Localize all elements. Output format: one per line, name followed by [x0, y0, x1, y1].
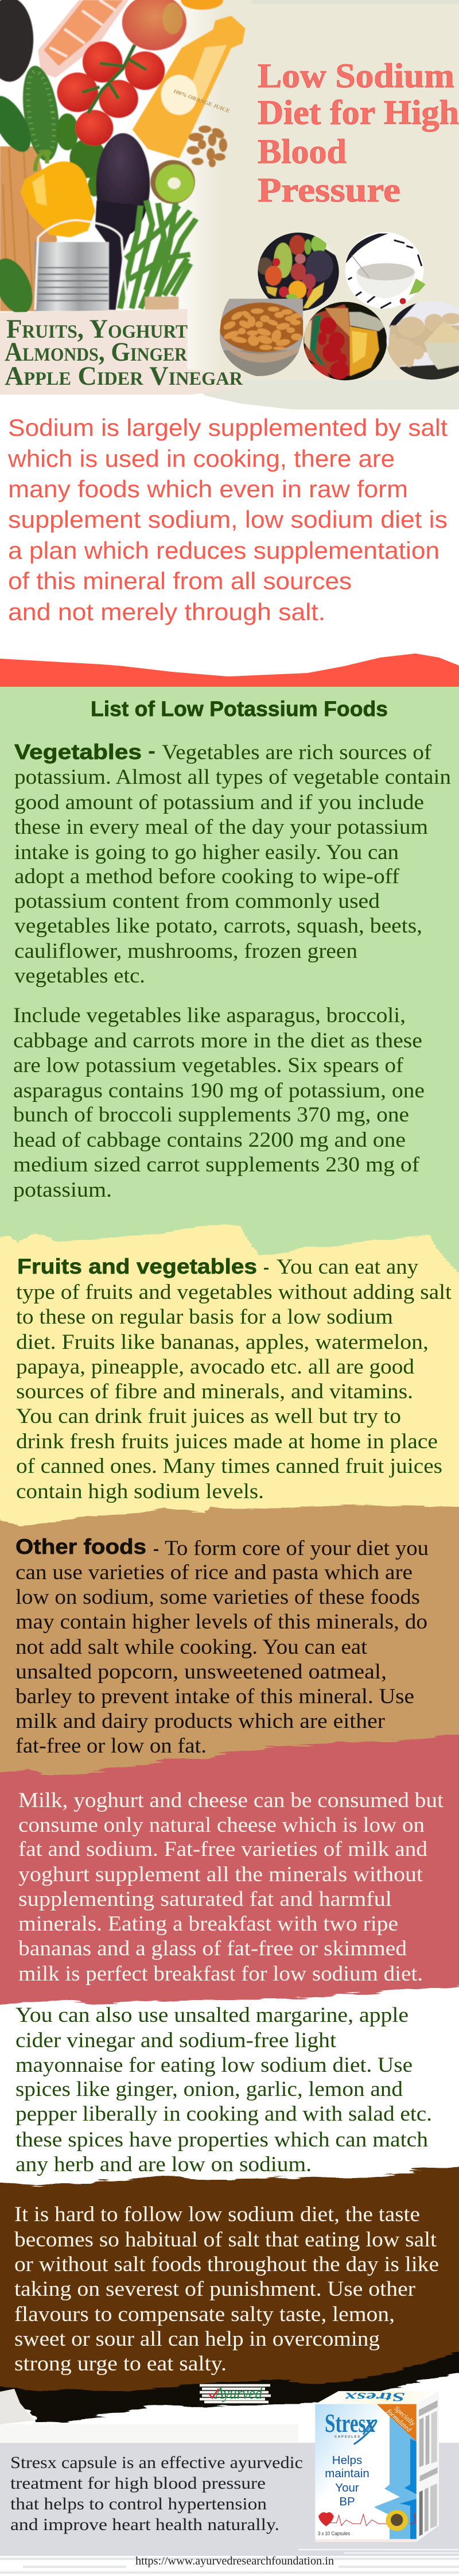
intro paragraph: supplement sodium, low sodium diet is: [8, 506, 448, 533]
icon: Stresx product box: [315, 2390, 439, 2542]
text block: Stresx description: and improve heart health naturally.: [10, 2515, 279, 2534]
caption panel: Apple Cider Vinegar: [5, 361, 243, 391]
text block: low potassium vegetables: head of cabbage contains 2200 mg and one: [13, 1128, 406, 1152]
panel: header collage: [0, 0, 459, 409]
text block: other foods: may contain higher levels of this minerals, do: [15, 1610, 427, 1634]
icon: apples and vinegar circle: [303, 301, 387, 381]
intro paragraph: and not merely through salt.: [8, 598, 325, 625]
text block: hard to follow: taking on severest of punishment. Use other: [14, 2277, 415, 2301]
icon: Stresx product box: CAPSULES: [334, 2435, 360, 2439]
text block: fruits and vegetables: -: [263, 1255, 269, 1279]
text block: low potassium vegetables: Include vegetables like asparagus, broccoli,: [13, 1004, 406, 1027]
text block: fruits and vegetables: type of fruits and vegetables without adding salt: [16, 1281, 452, 1304]
intro paragraph: a plan which reduces supplementation: [8, 537, 439, 564]
text block: spices: You can also use unsalted margarine, apple: [15, 2003, 409, 2027]
text block: other foods: barley to prevent intake of this mineral. Use: [15, 1685, 414, 1708]
text block: hard to follow: or without salt foods throughout the day is like: [14, 2253, 439, 2276]
text block: fruits and vegetables: papaya, pineapple, avocado etc. all are good: [16, 1355, 415, 1379]
icon: yoghurt circle: [345, 232, 426, 308]
text block: vegetables: -: [148, 739, 155, 763]
text block: fruits and vegetables: You can eat any: [277, 1255, 419, 1279]
text block: hard to follow: becomes so habitual of salt that eating low salt: [14, 2228, 437, 2252]
text block: vegetables: [14, 739, 451, 988]
text block: spices: spices like ginger, onion, garlic, lemon and: [15, 2078, 403, 2101]
icon: Stresx product box: 3 x 10 Capsules: [318, 2531, 350, 2537]
icon: Stresx product box: Stresx: [325, 2409, 375, 2438]
intro paragraph: which is used in cooking, there are: [7, 445, 395, 472]
text block: dairy: supplementing saturated fat and harmful: [18, 1887, 392, 1911]
text block: hard to follow: It is hard to follow low sodium diet, the taste: [14, 2203, 420, 2226]
icon: Stresx product box: Specially: [393, 2404, 417, 2427]
text block: dairy: minerals. Eating a breakfast with two ripe: [18, 1912, 398, 1936]
footer url: [0, 2555, 459, 2573]
panel: dark brush background: [0, 2167, 459, 2442]
text block: other foods: can use varieties of rice and pasta which are: [15, 1561, 413, 1584]
text block: dairy: yoghurt supplement all the minerals without: [18, 1863, 423, 1886]
title: Pressure: [258, 171, 400, 209]
bottle label text: 100% ORANGE JUICE: [172, 88, 231, 114]
text block: vegetables: vegetables like potato, carrots, squash, beets,: [14, 914, 422, 938]
text block: hard to follow: strong urge to eat salty.: [14, 2352, 227, 2376]
text block: fruits and vegetables: [16, 1255, 452, 1503]
icon: Stresx product box: maintain: [325, 2467, 369, 2480]
text block: Stresx description: Stresx capsule is an effective ayurvedic: [10, 2453, 303, 2472]
panel: product promo band: [0, 2443, 459, 2556]
text block: other foods: unsalted popcorn, unsweetened oatmeal,: [15, 1660, 387, 1684]
text block: low potassium vegetables: bunch of broccoli supplements 370 mg, one: [13, 1103, 409, 1127]
text block: fruits and vegetables: drink fresh fruits juices made at home in place: [16, 1430, 438, 1453]
text block: fruits and vegetables: Fruits and vegetables: [17, 1255, 257, 1278]
title: Diet for High: [258, 94, 459, 131]
text block: hard to follow: sweet or sour all can help in overcoming: [14, 2327, 380, 2351]
text block: low potassium vegetables: are low potassium vegetables. Six spears of: [13, 1054, 404, 1077]
text block: other foods: Other foods: [15, 1535, 146, 1558]
text block: vegetables: intake is going to go higher easily. You can: [14, 841, 399, 864]
title: Low Sodium: [258, 57, 454, 95]
icon: Stresx product box: Your: [335, 2481, 359, 2494]
text block: dairy: consume only natural cheese which is low on: [18, 1813, 425, 1837]
text block: low potassium vegetables: asparagus contains 190 mg of potassium, one: [13, 1079, 425, 1103]
text block: fruits and vegetables: sources of fibre and minerals, and vitamins.: [16, 1380, 413, 1403]
text block: spices: cider vinegar and sodium-free light: [15, 2029, 337, 2052]
panel: rose dairy background: [0, 1735, 459, 2003]
text block: dairy: Milk, yoghurt and cheese can be consumed but: [18, 1789, 444, 1812]
beige backdrop: [164, 0, 459, 409]
text block: vegetables: potassium. Almost all types of vegetable contain: [14, 765, 451, 789]
text block: other foods: To form core of your diet you: [165, 1537, 429, 1560]
text block: low potassium vegetables: medium sized carrot supplements 230 mg of: [13, 1153, 420, 1177]
text block: vegetables: cauliflower, mushrooms, frozen green: [14, 939, 357, 963]
photo: groceries: [0, 0, 246, 319]
text block: other foods: [15, 1535, 429, 1758]
icon: Stresx product box: BP: [339, 2495, 355, 2508]
text block: vegetables: these in every meal of the day your potassium: [14, 815, 428, 839]
text block: other foods: not add salt while cooking. You can eat: [15, 1635, 368, 1659]
text block: dairy: [18, 1789, 444, 1986]
text block: low potassium vegetables: [13, 1004, 425, 1202]
title: [258, 57, 459, 209]
text block: spices: these spices have properties which can match: [15, 2128, 429, 2152]
icon: fruit circle: [256, 231, 340, 312]
text block: dairy: bananas and a glass of fat-free or skimmed: [18, 1937, 407, 1960]
panel: tan other foods background: [0, 1505, 459, 1821]
text block: low potassium vegetables: potassium.: [13, 1178, 112, 1202]
intro paragraph: of this mineral from all sources: [8, 567, 352, 594]
text block: hard to follow: [14, 2203, 439, 2376]
text block: spices: mayonnaise for eating low sodium diet. Use: [15, 2053, 413, 2077]
food circles: [218, 231, 459, 381]
panel: yellow fruits background: [0, 1225, 459, 1545]
text block: fruits and vegetables: diet. Fruits like bananas, apples, watermelon,: [16, 1330, 429, 1354]
footer url: https://www.ayurvedresearchfoundation.in: [135, 2555, 334, 2567]
text block: spices: [15, 2003, 432, 2176]
text block: vegetables: adopt a method before cooking to wipe-off: [14, 865, 400, 888]
text block: spices: any herb and are low on sodium.: [15, 2153, 312, 2176]
text block: vegetables: vegetables etc.: [14, 964, 145, 988]
text block: vegetables: Vegetables are rich sources of: [162, 741, 432, 764]
icon: almonds circle: [218, 299, 305, 379]
icon: Stresx product box: formulated: [385, 2407, 414, 2434]
text block: dairy: milk is perfect breakfast for low sodium diet.: [18, 1962, 423, 1986]
icon: Stresx product box: Stresx: [345, 2390, 405, 2404]
text block: low potassium vegetables: cabbage and carrots more in the diet as these: [13, 1029, 422, 1053]
text block: vegetables: Vegetables: [14, 740, 142, 764]
caption panel: Fruits, Yoghurt: [6, 314, 188, 344]
intro paragraph: [7, 414, 448, 625]
text block: Stresx description: that helps to control hypertension: [10, 2494, 267, 2513]
text block: Stresx description: [10, 2453, 303, 2534]
text block: fruits and vegetables: contain high sodium levels.: [16, 1480, 264, 1503]
intro paragraph: many foods which even in raw form: [8, 475, 408, 502]
logo: Ayurved: Ayurved: [214, 2385, 263, 2403]
panel: green vegetables section: [0, 687, 459, 1318]
text block: other foods: -: [153, 1537, 159, 1560]
caption panel: Almonds, Ginger: [5, 337, 188, 367]
red brush band: [0, 653, 459, 687]
intro paragraph: Sodium is largely supplemented by salt: [8, 414, 448, 441]
text block: fruits and vegetables: to these on regular basis for a low sodium: [16, 1305, 393, 1329]
text block: fruits and vegetables: You can drink fruit juices as well but try to: [16, 1405, 401, 1428]
text block: vegetables: potassium content from commonly used: [14, 889, 380, 913]
text block: hard to follow: flavours to compensate salty taste, lemon,: [14, 2303, 395, 2326]
text block: spices: pepper liberally in cooking and with salad etc.: [15, 2102, 432, 2126]
text block: fruits and vegetables: of canned ones. Many times canned fruit juices: [16, 1455, 442, 1478]
heading: list of foods: List of Low Potassium Foods: [91, 697, 388, 721]
icon: Stresx product box: Helps: [332, 2454, 362, 2467]
title: Blood: [258, 133, 347, 171]
text block: other foods: milk and dairy products which are either: [15, 1709, 385, 1733]
caption panel: [0, 309, 244, 394]
text block: Stresx description: treatment for high blood pressure: [10, 2474, 266, 2493]
icon: ginger circle: [386, 300, 459, 381]
text block: dairy: fat and sodium. Fat-free varieties of milk and: [18, 1838, 428, 1861]
text block: other foods: fat-free or low on fat.: [15, 1734, 207, 1758]
text block: other foods: low on sodium, some varieties of these foods: [15, 1585, 420, 1609]
text block: vegetables: good amount of potassium and if you include: [14, 791, 424, 814]
